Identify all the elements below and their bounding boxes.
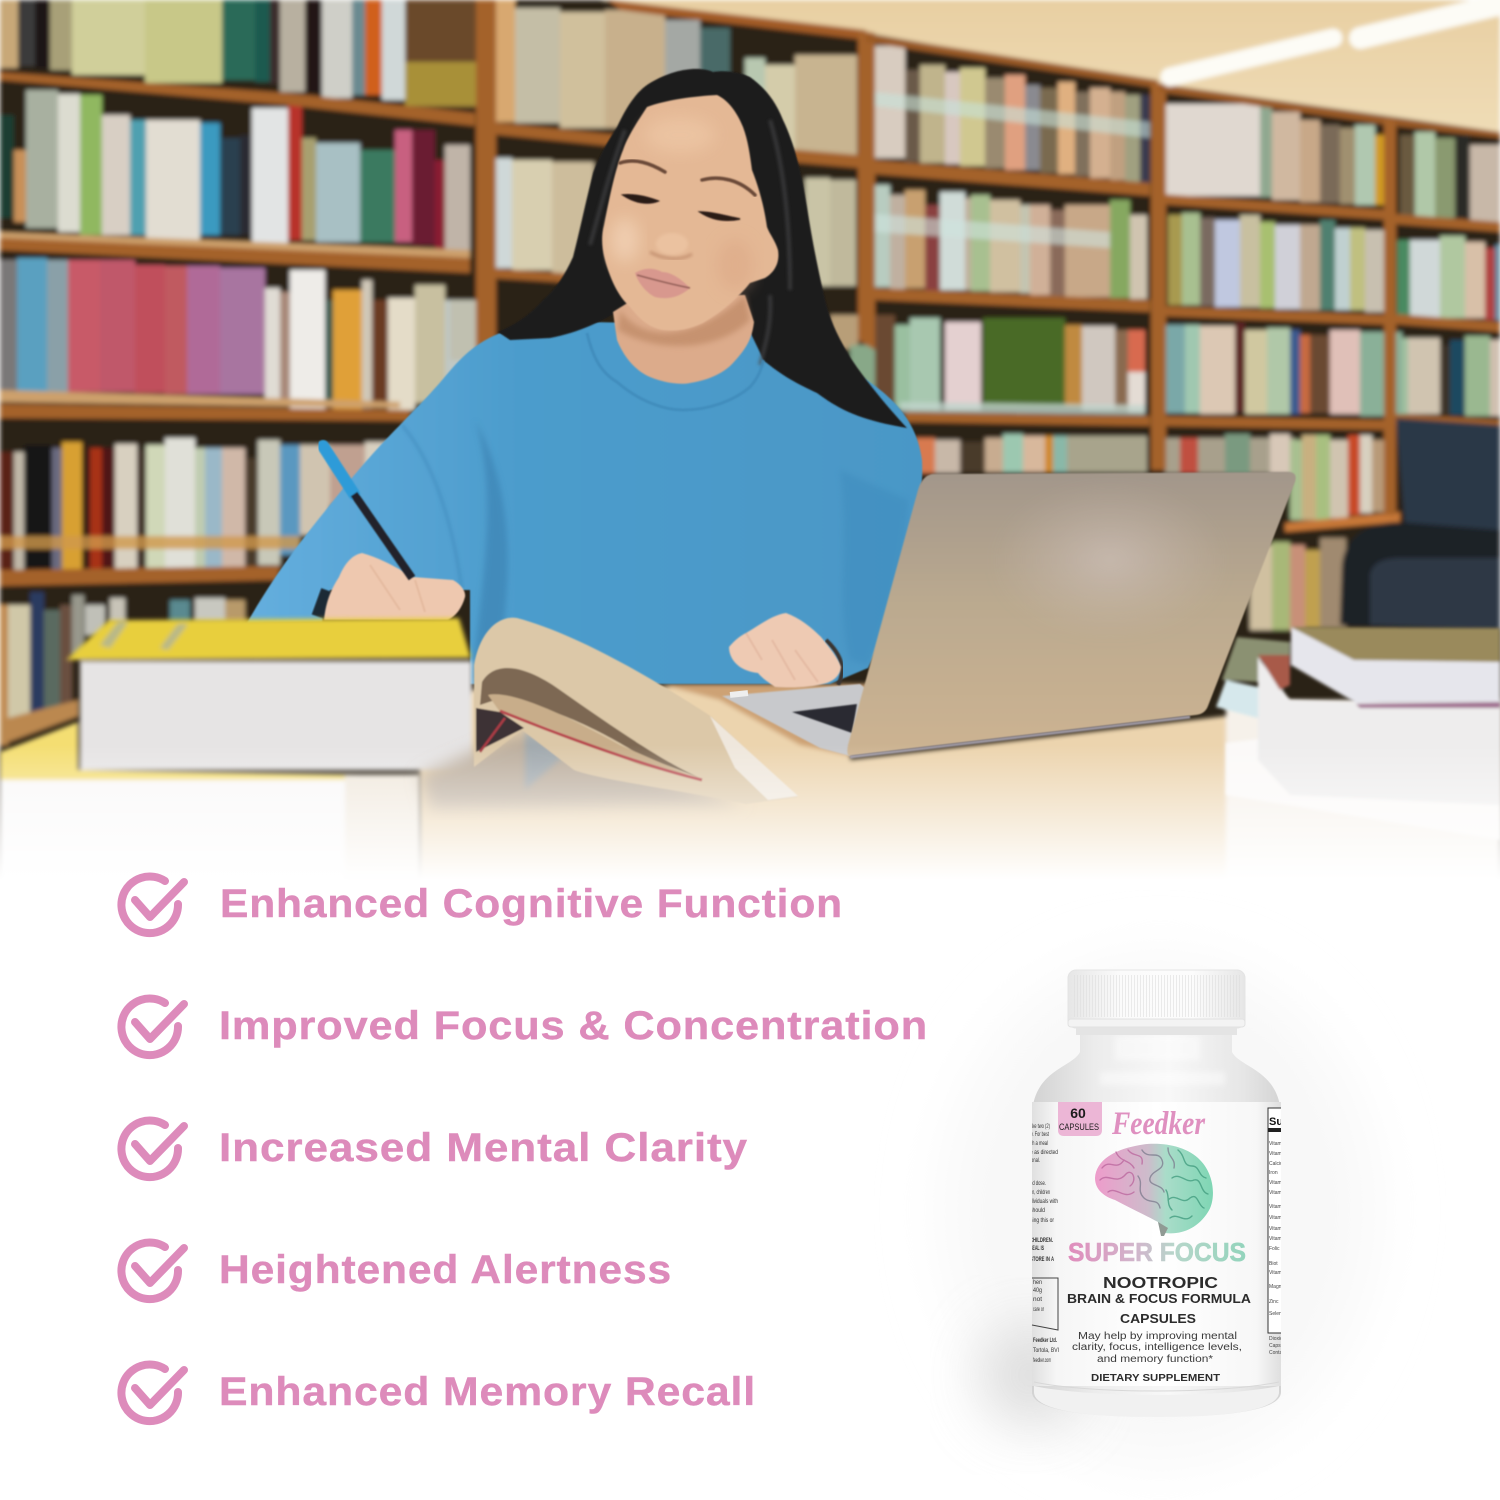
face xyxy=(602,95,778,331)
capsule count badge xyxy=(1058,1102,1102,1136)
supplement facts panel: Vitamin xyxy=(1269,1215,1286,1221)
neck xyxy=(613,295,754,384)
supplement facts panel: Selenium xyxy=(1269,1311,1290,1317)
sticker xyxy=(730,690,748,698)
supplement facts panel: Sup xyxy=(1269,1116,1290,1128)
side directions text: dividuals with xyxy=(1030,1198,1058,1205)
side directions text: should xyxy=(1030,1207,1045,1214)
side directions text: en, children xyxy=(1030,1189,1050,1196)
lid sheen xyxy=(990,480,1230,640)
left unit books xyxy=(0,0,477,745)
loose sheet xyxy=(710,716,798,800)
nose xyxy=(650,233,692,258)
side directions text: ith a meal xyxy=(1030,1140,1048,1147)
product name: SUPER FOCUS xyxy=(1068,1237,1246,1267)
side directions text: sing this or xyxy=(1030,1217,1055,1224)
check icon xyxy=(121,877,184,933)
bottle shadow xyxy=(980,1325,1080,1425)
spine shadow xyxy=(476,708,524,752)
neck shadow xyxy=(618,295,750,346)
supplement facts panel: Capsule xyxy=(1269,1343,1288,1349)
writing hand xyxy=(324,553,465,620)
hair strand highlights xyxy=(590,120,790,365)
benefit 4 xyxy=(121,1243,672,1299)
laptop base xyxy=(722,684,870,756)
supplement facts panel: Vitamin xyxy=(1269,1180,1286,1186)
laptop lid xyxy=(847,472,1296,756)
product bottle with backdrop xyxy=(962,970,1281,1442)
benefit 2 xyxy=(121,999,928,1055)
supplement facts panel: Biot xyxy=(1269,1261,1278,1267)
right cheek shade xyxy=(717,239,753,291)
shadow under book xyxy=(420,730,745,810)
bookshelves background xyxy=(0,0,1500,900)
cap xyxy=(1068,970,1245,1035)
page stack layers xyxy=(480,668,700,778)
resting hand xyxy=(729,613,841,688)
bottle base xyxy=(1034,1386,1279,1417)
sweater fold shading xyxy=(472,420,508,680)
supplement facts panel: Contact xyxy=(1269,1350,1287,1356)
lid shadow line xyxy=(850,717,1190,757)
right foreground books xyxy=(1216,627,1500,840)
check icon xyxy=(121,999,184,1055)
far right unit books xyxy=(1165,104,1500,630)
side directions text xyxy=(1030,1123,1059,1364)
lower slab xyxy=(1226,735,1500,840)
right unit books xyxy=(875,46,1150,473)
wooden shelf frames xyxy=(0,0,1500,745)
eyes xyxy=(623,195,740,220)
large white book xyxy=(1258,657,1500,805)
side directions text: ed dose. xyxy=(1030,1180,1046,1187)
top book cover xyxy=(1291,627,1500,662)
claim text: May help by improving mental xyxy=(1078,1331,1237,1342)
supplement facts panel: Dioxide xyxy=(1269,1336,1286,1342)
pen xyxy=(323,446,412,578)
laptop xyxy=(722,472,1296,757)
supplement facts panel: Vitamin xyxy=(1269,1141,1286,1147)
supplement facts panel: Calcium xyxy=(1269,1161,1287,1167)
blue-edged pages xyxy=(1216,680,1258,718)
red page edge xyxy=(500,711,702,780)
supplement facts panel: Vitamin xyxy=(1269,1204,1286,1210)
claim text: clarity, focus, intelligence levels, xyxy=(1072,1342,1242,1353)
table xyxy=(420,684,1500,900)
side directions text: Tortola, BVI xyxy=(1033,1347,1059,1354)
benefit 1 xyxy=(121,877,843,933)
bottle shoulder highlight xyxy=(1100,1036,1225,1085)
dietary supplement: DIETARY SUPPLEMENT xyxy=(1091,1373,1220,1384)
check icon xyxy=(121,1243,184,1299)
cheek highlight xyxy=(611,218,639,262)
claim text xyxy=(1072,1331,1242,1365)
supplement facts panel: Vitamin xyxy=(1269,1270,1286,1276)
side directions text: hen xyxy=(1033,1279,1042,1286)
foreground yellow book xyxy=(0,618,472,885)
label: Increased Mental Clarity xyxy=(219,1126,748,1170)
side directions text: Feedker Ltd. xyxy=(1033,1337,1057,1344)
bottle body xyxy=(1032,1034,1281,1417)
supplement facts panel xyxy=(1268,1108,1281,1354)
middle unit books xyxy=(450,0,875,405)
brand: Feedker xyxy=(1111,1106,1206,1142)
keyboard xyxy=(792,704,857,733)
check icon xyxy=(121,1121,184,1177)
supplement facts panel: Vitamin xyxy=(1269,1236,1286,1242)
side directions text: CHILDREN. xyxy=(1030,1237,1053,1244)
backdrop glow xyxy=(945,960,1375,1460)
check icon xyxy=(121,1365,184,1421)
sweater under book xyxy=(525,730,565,790)
side directions text: 40g xyxy=(1033,1287,1042,1294)
hair xyxy=(498,69,907,428)
label: Enhanced Memory Recall xyxy=(219,1370,756,1414)
ceiling lights xyxy=(1170,2,1500,77)
supplement facts panel: Folic xyxy=(1269,1246,1280,1252)
supplement facts panel: Vitamin xyxy=(1269,1226,1286,1232)
forehead highlight xyxy=(645,117,715,153)
capsule count badge: CAPSULES xyxy=(1059,1122,1099,1133)
sweater collar xyxy=(587,333,763,410)
side directions text: care or xyxy=(1033,1306,1044,1313)
claim text: and memory function* xyxy=(1097,1354,1213,1365)
label xyxy=(1030,1102,1290,1417)
open book xyxy=(420,618,798,810)
sweater sleeve seam xyxy=(402,425,462,590)
side directions text: SEAL IS xyxy=(1030,1245,1044,1252)
upper pages xyxy=(474,618,798,804)
top book pages xyxy=(1291,627,1500,703)
side warning box xyxy=(1032,1278,1058,1330)
supplement facts panel: Magnes xyxy=(1269,1284,1287,1290)
product descriptors: NOOTROPIC xyxy=(1103,1275,1219,1292)
supplement facts panel: Zinc xyxy=(1269,1299,1279,1305)
green small book xyxy=(1222,637,1290,682)
side directions text: ake two (2) xyxy=(1030,1123,1050,1130)
eyebrows xyxy=(620,161,755,195)
label: Improved Focus & Concentration xyxy=(219,1004,928,1048)
bottle xyxy=(1030,970,1290,1417)
side directions text: ional. xyxy=(1030,1157,1040,1164)
benefit 3 xyxy=(121,1121,748,1177)
student xyxy=(247,69,922,688)
label: Enhanced Cognitive Function xyxy=(220,882,843,926)
side directions text: not xyxy=(1033,1296,1042,1303)
benefits list xyxy=(121,877,928,1421)
lips xyxy=(635,269,690,298)
side directions text: e as directed xyxy=(1030,1149,1058,1156)
label: CAPSULES xyxy=(1120,1311,1196,1326)
supplement facts panel: Vitamin xyxy=(1269,1151,1286,1157)
supplement facts panel: Vitamin xyxy=(1269,1190,1286,1196)
white fade overlays xyxy=(0,745,1500,880)
chair and bag xyxy=(1340,418,1500,630)
side directions text: ly. For best xyxy=(1030,1131,1049,1138)
side directions text: STORE IN A xyxy=(1030,1256,1054,1263)
label: Heightened Alertness xyxy=(219,1248,672,1292)
side directions text: feedker.com xyxy=(1033,1357,1051,1364)
brain xyxy=(1095,1144,1213,1236)
sleeve cuff xyxy=(312,588,336,620)
benefit 5 xyxy=(121,1365,756,1421)
supplement facts panel: Iron xyxy=(1269,1170,1278,1176)
capsule count badge: 60 xyxy=(1070,1105,1086,1121)
brain stem xyxy=(1158,1222,1168,1236)
sweater xyxy=(247,322,922,684)
right sleeve shade xyxy=(840,470,908,665)
wristwatch and sleeve edge xyxy=(826,640,842,685)
label: BRAIN & FOCUS FORMULA xyxy=(1067,1291,1252,1306)
